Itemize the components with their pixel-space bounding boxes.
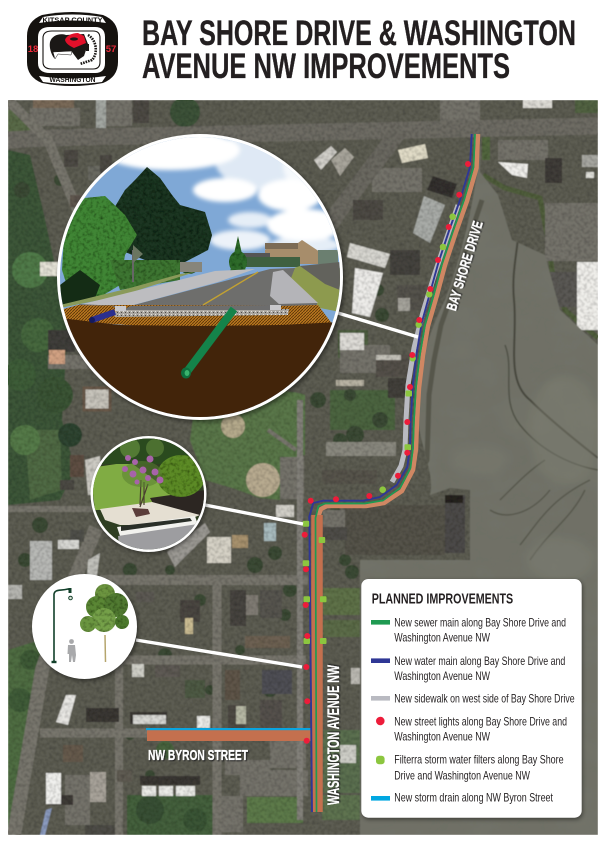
ground layers [60, 305, 333, 327]
legend: street lights: Washington Avenue NW [394, 731, 490, 744]
legend: storm drain: New storm drain along NW Byron Street [394, 792, 554, 805]
legend panel: planned improvements [361, 579, 582, 820]
county logo: KITSAP COUNTY [42, 16, 103, 24]
county logo: 57 [106, 44, 116, 55]
icon: eagle head [50, 33, 96, 64]
icon: blue water pipe [89, 312, 115, 323]
pavement section [79, 303, 317, 310]
callout: filterra planter photo [90, 436, 210, 556]
orange trench: Bay Shore Drive and Washington Avenue [317, 134, 478, 812]
title [142, 14, 576, 86]
shoulder and rocks [291, 266, 340, 312]
filterra storm water filters [303, 213, 456, 644]
label: Bay Shore Drive: BAY SHORE DRIVE [443, 219, 487, 313]
new sidewalk [392, 205, 458, 482]
legend: sewer main [371, 617, 566, 645]
label: NW Byron Street: NW BYRON STREET [148, 747, 248, 764]
icon: tree [80, 584, 129, 662]
tidal flats [360, 136, 600, 835]
legend: filterra filters: Drive and Washington Avenue NW [394, 769, 530, 782]
gravel base [113, 309, 289, 317]
road labels [148, 219, 487, 805]
legend: street lights [376, 716, 567, 744]
county logo: WASHINGTON [50, 77, 96, 84]
legend: filterra filters [376, 754, 564, 782]
legend: sidewalk [371, 694, 574, 705]
street lights [302, 161, 471, 744]
legend: sewer main: Washington Avenue NW [394, 632, 490, 645]
new sewer main [316, 134, 475, 812]
connector lines from callouts [136, 313, 418, 667]
county logo: 18 [28, 44, 38, 55]
icon: person silhouette [68, 639, 76, 662]
county logo [27, 12, 118, 86]
icon: street lamp [52, 588, 72, 662]
callout: street light and tree illustration [32, 574, 138, 681]
legend: storm drain [371, 792, 554, 805]
storm drain: NW Byron Street [146, 728, 311, 741]
distant building [240, 240, 338, 267]
legend: water main: Washington Avenue NW [394, 670, 490, 683]
new water main [309, 134, 472, 812]
icon: green sewer pipe [181, 309, 234, 378]
legend panel: planned improvements: PLANNED IMPROVEMENTS [372, 591, 513, 608]
trees [60, 167, 247, 308]
route: excavation and utilities [146, 134, 478, 812]
legend: water main [371, 655, 565, 683]
callout: road cross-section photo [55, 130, 347, 422]
label: Washington Avenue NW: WASHINGTON AVENUE NW [325, 665, 343, 805]
roadway [130, 268, 295, 306]
